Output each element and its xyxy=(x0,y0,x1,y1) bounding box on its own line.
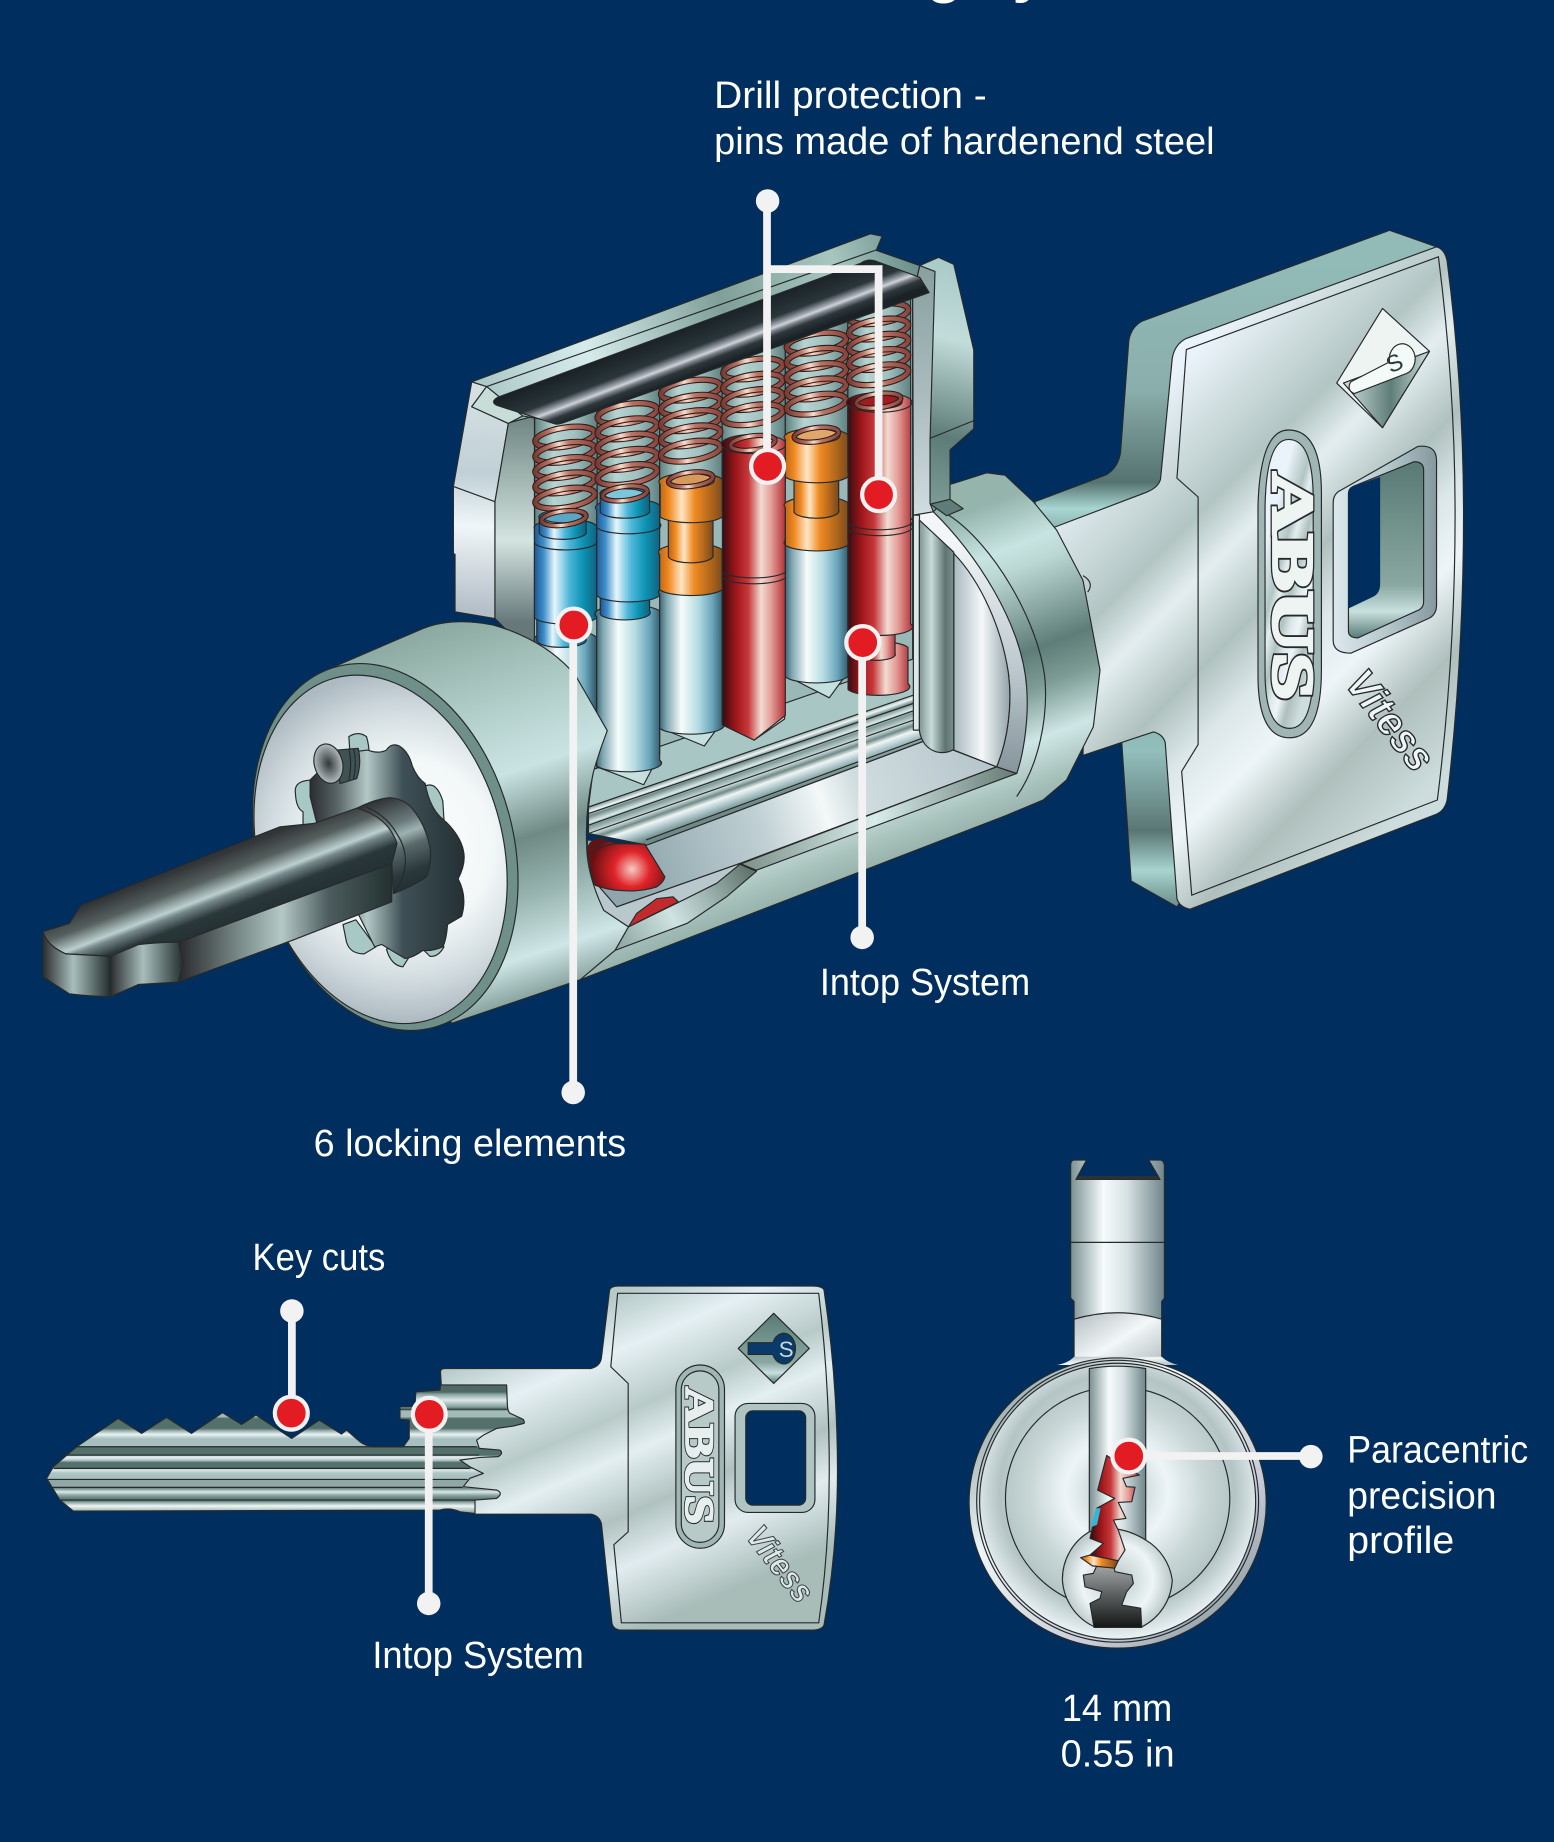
floor behind pin tips xyxy=(588,658,916,807)
key logo plate: ABUS: ABUS xyxy=(1260,472,1325,700)
label: 6 locking elements: 6 locking elements xyxy=(314,1122,626,1164)
label: intop system: Intop System xyxy=(820,961,1030,1003)
label: diameter xyxy=(1061,1687,1175,1775)
flat key diamond mark: S xyxy=(779,1337,794,1362)
label: drill protection: pins made of hardenend steel xyxy=(714,120,1215,162)
key brand text: Vitess xyxy=(1337,660,1445,780)
pin column 2: blue and steel xyxy=(595,484,662,785)
cylinder back wall xyxy=(507,282,913,811)
pin column 3: orange and steel xyxy=(658,470,724,746)
pin column 6: red xyxy=(846,391,913,695)
keyway circle xyxy=(1062,1529,1172,1627)
leader: key cuts xyxy=(275,1299,308,1430)
front barrel cap xyxy=(330,622,628,1023)
label: paracentric precision profile: precision xyxy=(1347,1474,1496,1516)
label: paracentric precision profile xyxy=(1347,1428,1528,1561)
cutaway interior: floor, rails, inner wall xyxy=(587,512,1027,907)
springs and pin bores xyxy=(534,294,911,540)
orange pin section xyxy=(1081,1555,1118,1568)
cylinder front face xyxy=(213,633,557,1061)
flat key blade xyxy=(47,1385,524,1513)
cam shaft xyxy=(43,798,431,997)
top plate xyxy=(472,234,920,423)
leader: 6 locking elements xyxy=(557,609,590,1104)
flat key, side view xyxy=(47,1286,837,1630)
label: key cuts: Key cuts xyxy=(253,1236,385,1278)
flat key diamond mark xyxy=(738,1313,809,1383)
left housing end xyxy=(453,382,534,658)
label: intop system, flat key: Intop System xyxy=(372,1634,584,1676)
leader: drill protection xyxy=(751,189,895,511)
black drill-protection bar xyxy=(494,260,929,424)
label: drill protection: Drill protection - xyxy=(714,74,987,116)
flat key bow xyxy=(440,1286,837,1630)
key diamond mark: S xyxy=(1382,348,1407,378)
key logo plate: ABUS xyxy=(1258,430,1325,738)
flat key logo plate: ABUS: ABUS xyxy=(677,1387,722,1524)
star-shaped cam xyxy=(295,734,464,967)
leader: intop system, flat key xyxy=(413,1398,446,1615)
label: diameter: 0.55 in xyxy=(1061,1733,1175,1775)
shoulder under shaft xyxy=(1057,1357,1178,1365)
key logo plate: ABUS: ABUS xyxy=(1260,472,1325,700)
flat key logo plate: ABUS xyxy=(676,1365,724,1548)
key window xyxy=(1333,446,1437,653)
key diamond mark xyxy=(1337,308,1429,428)
leader: intop system, cylinder xyxy=(846,626,879,949)
flat key window xyxy=(735,1403,815,1512)
pin column 4: red xyxy=(721,433,787,740)
flat key logo plate: ABUS: ABUS xyxy=(677,1387,722,1524)
right housing end xyxy=(913,257,974,516)
blue pin sliver xyxy=(1091,1508,1101,1527)
screw on the cam xyxy=(310,741,360,787)
pin column 1: blue and steel xyxy=(534,508,598,752)
flat key brand text: Vitess xyxy=(739,1518,822,1609)
label: paracentric precision profile: Paracentric xyxy=(1347,1428,1528,1470)
collar and lower barrel xyxy=(580,473,1100,980)
pin column 5: orange and steel xyxy=(784,425,850,698)
label: paracentric precision profile: profile xyxy=(1347,1519,1454,1561)
label: diameter: 14 mm xyxy=(1062,1687,1172,1729)
red ball in cavity xyxy=(586,838,756,950)
key bow, 3D view xyxy=(1035,230,1464,909)
red pin section xyxy=(1090,1455,1139,1561)
outer ring xyxy=(969,1358,1266,1648)
cam shaft, end view xyxy=(1071,1160,1164,1369)
inner plug circle xyxy=(1005,1387,1230,1610)
key profile section xyxy=(1083,1566,1142,1627)
label: drill protection xyxy=(714,74,1215,162)
cylinder cross-section xyxy=(969,1160,1266,1648)
pin slot xyxy=(1089,1366,1146,1540)
leader: paracentric profile xyxy=(1112,1440,1323,1472)
